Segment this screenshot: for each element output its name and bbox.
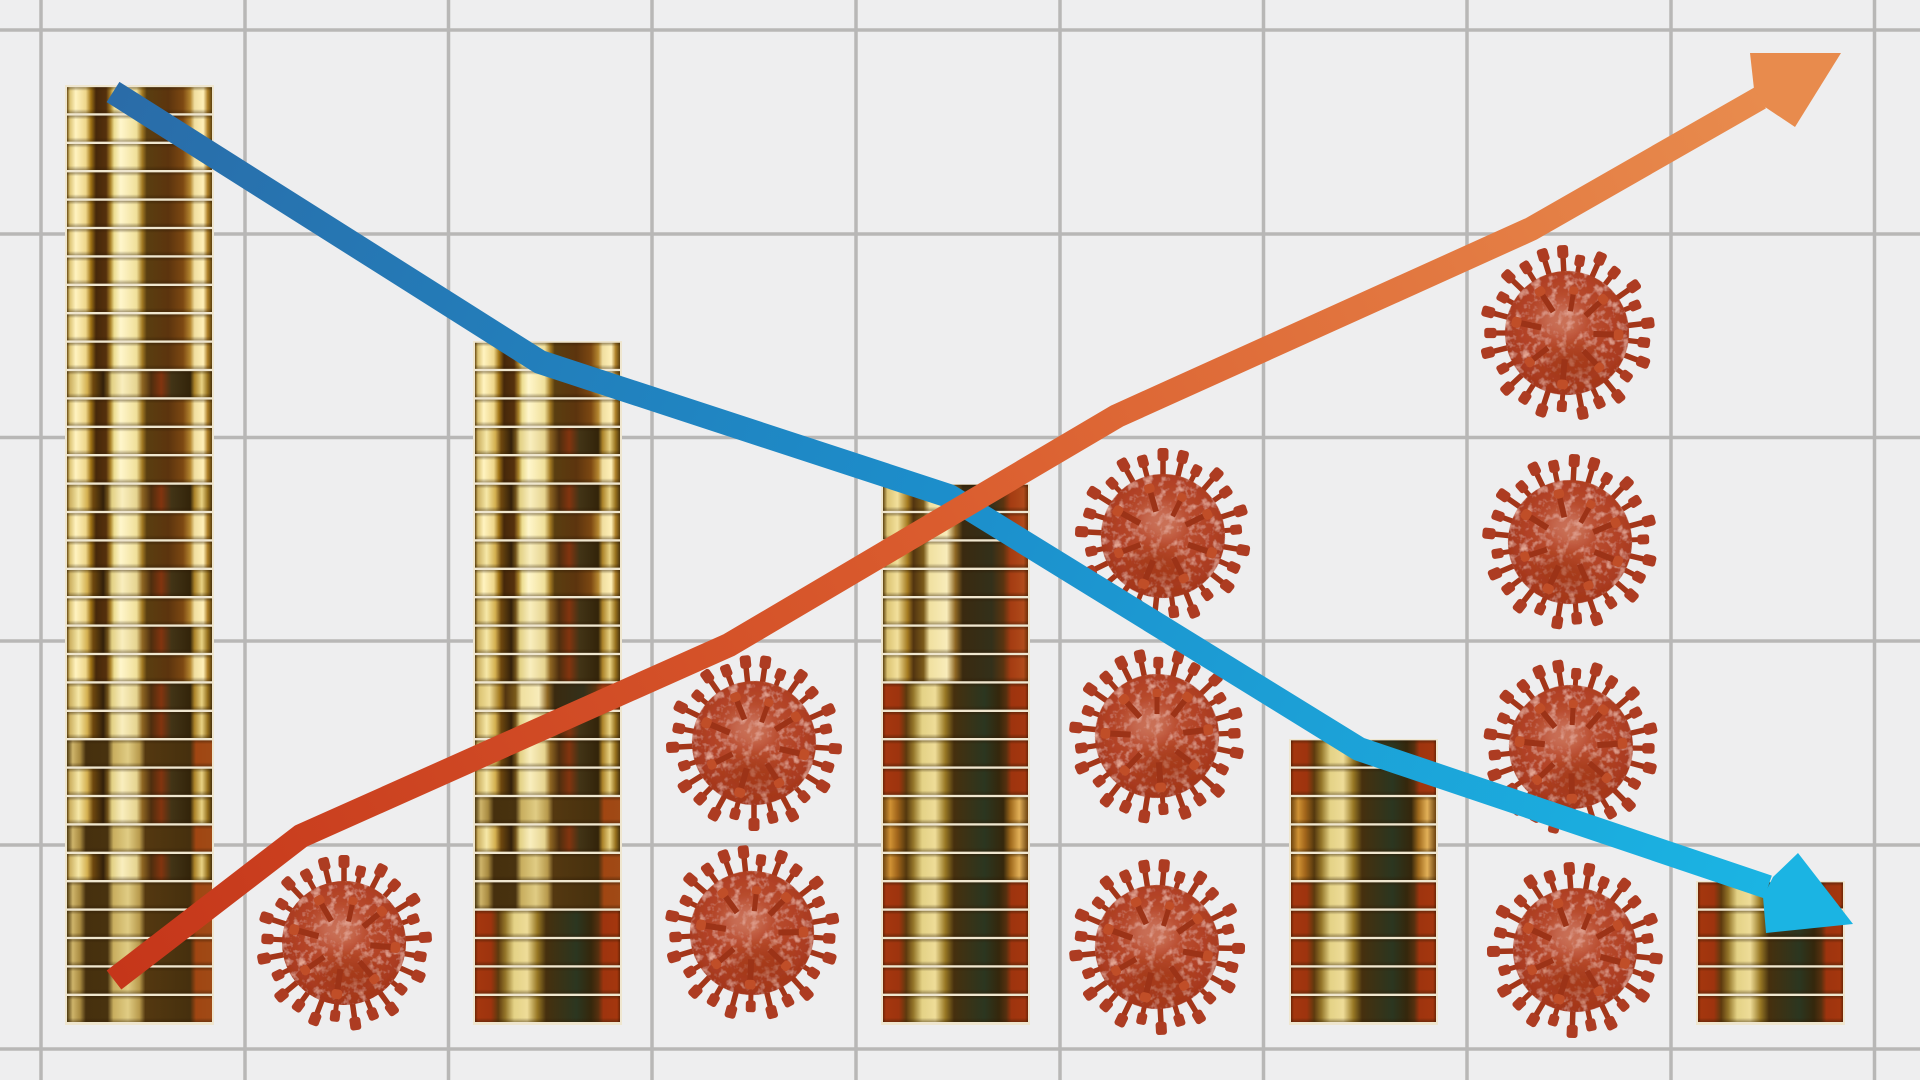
coin stack 1 (65, 85, 214, 1025)
virus column 3: middle virus (1053, 632, 1262, 840)
arrow: rising orange trend line (114, 53, 1841, 980)
coin stack 5 (1696, 881, 1845, 1025)
coin stack 2 (473, 341, 622, 1025)
virus column 1: virus (257, 855, 432, 1031)
coin stack 3 (881, 484, 1030, 1025)
arrow: falling blue trend line (113, 92, 1853, 933)
virus column 2: lower virus (656, 836, 849, 1030)
virus column 3: upper virus (1057, 429, 1270, 643)
virus column 4: third virus (1471, 646, 1672, 848)
virus column 4: second virus (1461, 432, 1680, 652)
virus column 4: bottom virus (1474, 848, 1677, 1052)
virus column 2: upper virus (655, 644, 854, 842)
virus column 3: lower virus (1062, 852, 1253, 1042)
coin stack 4 (1289, 739, 1438, 1025)
virus column 4: top virus (1475, 241, 1660, 425)
